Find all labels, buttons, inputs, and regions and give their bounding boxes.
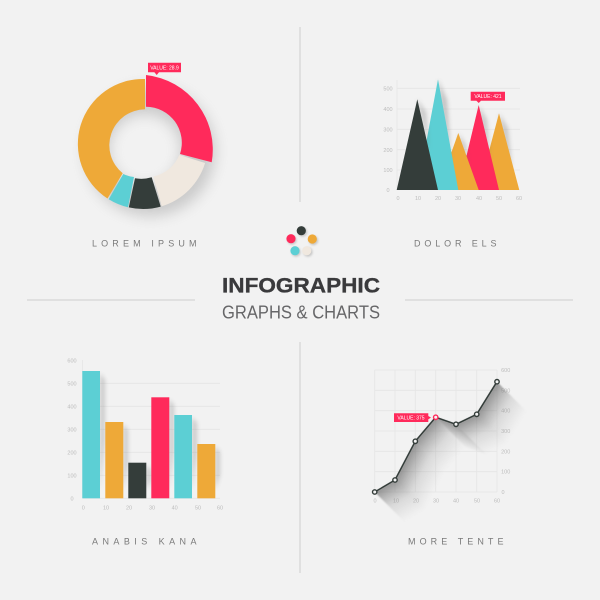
bar: teal 0	[82, 371, 100, 498]
line grid	[375, 370, 497, 492]
line y axis labels: 300	[501, 429, 510, 435]
bar: red 30	[151, 397, 169, 498]
triangle y axis labels: 400	[383, 107, 393, 113]
bar x axis labels: 0	[82, 506, 85, 512]
slice: red	[146, 75, 213, 162]
triangle y axis labels: 300	[383, 128, 393, 134]
bar x axis labels: 30	[149, 506, 155, 512]
bar y axis labels: 0	[70, 496, 74, 502]
line y axis labels: 200	[501, 449, 510, 455]
line x axis labels	[373, 498, 500, 504]
triangle x axis labels: 40	[476, 196, 482, 202]
line x axis labels: 30	[433, 498, 439, 504]
bar y axis labels: 100	[67, 473, 77, 479]
bar: orange 10	[105, 422, 123, 498]
data line	[375, 382, 497, 492]
subtitle: GRAPHS & CHARTS	[222, 302, 380, 322]
line y axis labels: 100	[501, 470, 510, 476]
triangle x axis labels: 10	[415, 196, 421, 202]
bar: orange 50	[197, 444, 215, 498]
slice: teal	[109, 174, 134, 207]
triangle: orange right	[479, 113, 519, 190]
line tooltip: VALUE: 375	[397, 416, 425, 422]
bar x axis labels: 40	[172, 506, 178, 512]
line long shadow	[375, 382, 527, 522]
line x axis labels: 60	[494, 498, 500, 504]
triangle y axis labels: 500	[383, 86, 393, 92]
bar x axis labels: 60	[217, 506, 223, 512]
triangle: dark	[397, 99, 438, 190]
triangle y axis labels	[383, 86, 393, 194]
line y axis labels: 600	[501, 368, 510, 374]
label: dolor els: DOLOR ELS	[414, 238, 496, 248]
line y axis labels: 400	[501, 409, 510, 415]
triangle x axis labels	[396, 196, 522, 202]
panel: line chart	[372, 368, 527, 522]
line x axis labels: 10	[393, 498, 399, 504]
triangle y axis labels: 200	[383, 148, 393, 154]
label: lorem ipsum: LOREM IPSUM	[92, 238, 196, 248]
triangle grid	[397, 80, 520, 190]
donut tooltip	[148, 63, 181, 75]
triangle: orange left	[438, 133, 479, 190]
bar x axis labels	[82, 506, 223, 512]
panel: triangle chart	[383, 79, 522, 202]
bar y axis labels	[67, 358, 77, 502]
title: INFOGRAPHIC	[222, 274, 380, 298]
panel: donut chart	[78, 63, 215, 216]
triangle x axis labels: 50	[496, 196, 502, 202]
bar x axis labels: 20	[126, 506, 132, 512]
bar y axis labels: 600	[67, 358, 77, 364]
bar y axis labels: 500	[67, 381, 77, 387]
bar shadows	[100, 373, 220, 490]
line y axis labels: 0	[501, 490, 505, 496]
triangle tooltip: VALUE: 421	[474, 94, 502, 100]
triangle: teal	[417, 79, 458, 190]
triangle x axis labels: 20	[435, 196, 441, 202]
slice: orange	[78, 79, 145, 198]
bar grid	[83, 360, 220, 498]
triangle y axis labels: 100	[383, 168, 393, 174]
triangle y axis labels: 0	[386, 188, 390, 194]
bar: teal 40	[174, 415, 192, 498]
label: more tente: MORE TENTE	[408, 536, 504, 546]
line tooltip	[394, 413, 431, 422]
slice: dark	[129, 177, 161, 209]
bar y axis labels: 400	[67, 404, 77, 410]
line x axis labels: 50	[474, 498, 480, 504]
panel: bar chart	[67, 358, 223, 512]
label: anabis kana: ANABIS KANA	[92, 536, 196, 546]
bar x axis labels: 10	[103, 506, 109, 512]
slice: beige	[153, 155, 205, 206]
line y axis labels	[501, 368, 510, 496]
donut drop shadow	[85, 86, 215, 216]
triangle x axis labels: 30	[455, 196, 461, 202]
data points	[372, 380, 499, 494]
triangle: red	[458, 105, 499, 190]
line x axis labels: 20	[413, 498, 419, 504]
line x axis labels: 40	[453, 498, 459, 504]
bar: dark 20	[128, 463, 146, 498]
line x axis labels: 0	[373, 498, 377, 504]
bar x axis labels: 50	[195, 506, 201, 512]
icon: five dots	[286, 226, 318, 257]
triangle x axis labels: 0	[396, 196, 400, 202]
bar y axis labels: 200	[67, 450, 77, 456]
triangle x axis labels: 60	[516, 196, 522, 202]
line y axis labels: 500	[501, 388, 510, 394]
bar y axis labels: 300	[67, 427, 77, 433]
donut tooltip: VALUE: 28.9	[150, 66, 179, 72]
